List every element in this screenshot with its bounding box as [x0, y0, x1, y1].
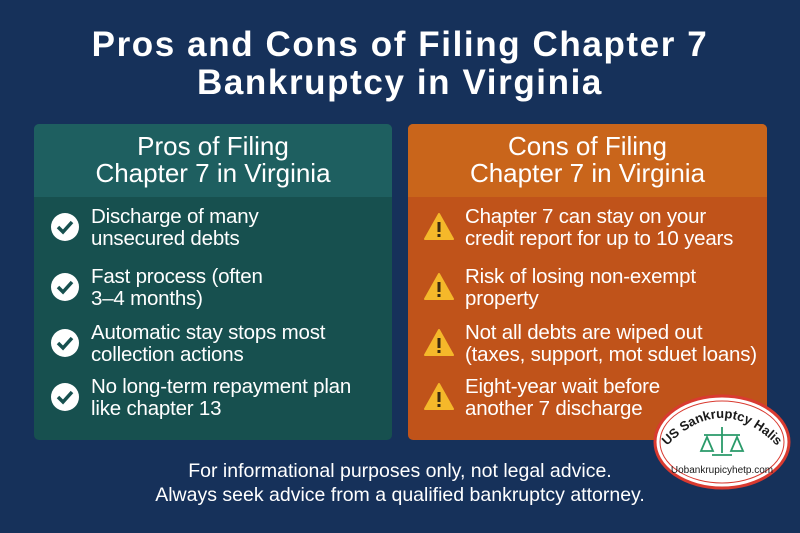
item: pro 3	[51, 321, 326, 366]
panel: cons: property	[465, 287, 539, 310]
heading: cons	[408, 124, 767, 197]
panel: cons: Not all debts are wiped out	[465, 321, 702, 344]
item: con 2	[424, 265, 696, 310]
panel: pros: like chapter 13	[91, 397, 221, 420]
panel: cons: Risk of losing non-exempt	[465, 265, 696, 288]
panel: cons: credit report for up to 10 years	[465, 227, 733, 250]
title: Bankruptcy in Virginia	[197, 63, 603, 102]
item: pro 2	[51, 265, 263, 310]
footer note: For informational purposes only, not legal advice.	[188, 460, 612, 482]
panel: pros: 3–4 months)	[91, 287, 203, 310]
panel: cons: another 7 discharge	[465, 397, 642, 420]
item: pro 4	[51, 375, 351, 420]
panel: pros: Discharge of many	[91, 205, 259, 228]
panel: pros: Fast process (often	[91, 265, 263, 288]
badge: logo	[654, 394, 790, 490]
panel: cons: Chapter 7 can stay on your	[465, 205, 706, 228]
footer note	[155, 460, 645, 506]
panel: pros: unsecured debts	[91, 227, 240, 250]
heading: cons: Cons of Filing	[508, 131, 667, 161]
title	[92, 25, 708, 102]
item: con 4	[424, 375, 660, 420]
panel: pros: Automatic stay stops most	[91, 321, 325, 344]
heading: pros: Pros of Filing	[137, 131, 289, 161]
item: con 1	[424, 205, 733, 250]
item: pro 1	[51, 205, 259, 250]
heading: pros	[34, 124, 392, 197]
title: Pros and Cons of Filing Chapter 7	[92, 25, 708, 64]
panel: pros	[34, 124, 392, 440]
badge: logo: Uobankrupicyhetp.com	[671, 465, 773, 476]
heading: cons: Chapter 7 in Virginia	[470, 158, 705, 188]
panel: cons: (taxes, support, mot sduet loans)	[465, 343, 757, 366]
panel: cons: Eight-year wait before	[465, 375, 660, 398]
item: con 3	[424, 321, 757, 366]
heading: pros: Chapter 7 in Virginia	[95, 158, 331, 188]
footer note: Always seek advice from a qualified bankruptcy attorney.	[155, 484, 645, 506]
badge: logo: US Sankruptcy Halis	[661, 411, 780, 445]
panel: pros: No long-term repayment plan	[91, 375, 351, 398]
panel: cons	[408, 124, 767, 440]
panel: pros: collection actions	[91, 343, 244, 366]
